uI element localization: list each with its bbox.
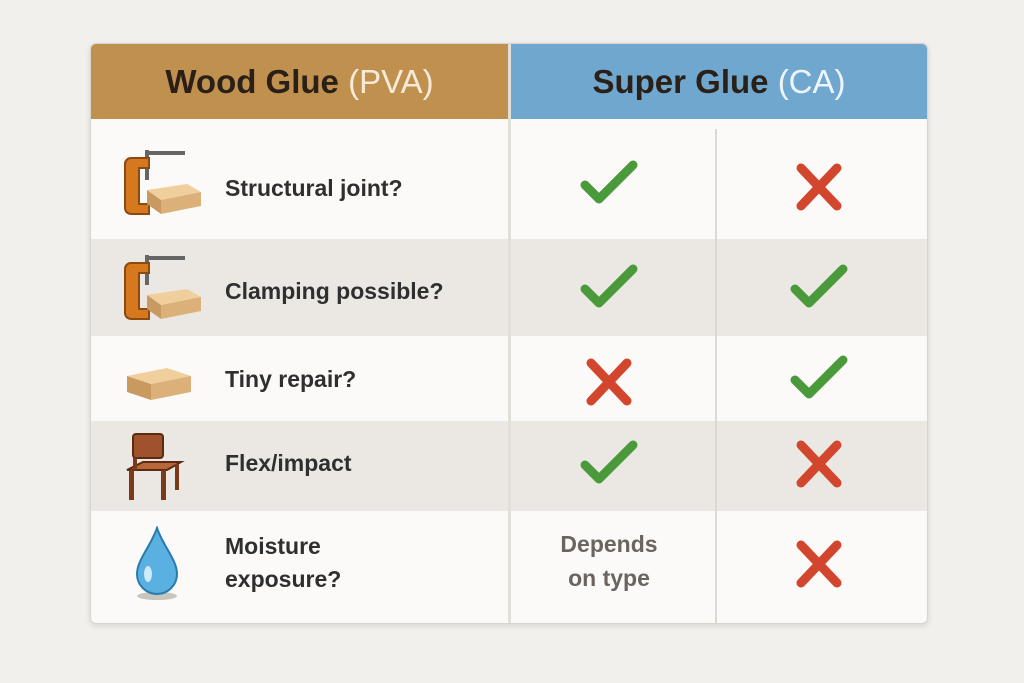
text: moisture exposure: exposure?	[225, 566, 341, 592]
row backgrounds	[91, 239, 927, 336]
text: depends on type	[560, 531, 658, 591]
text: structural joint: Structural joint?	[225, 175, 403, 201]
check r1	[580, 160, 638, 204]
check r4	[580, 440, 638, 484]
row 2 label	[124, 255, 444, 320]
header: super glue: Super Glue	[592, 62, 769, 100]
icon: clamp	[124, 150, 201, 215]
check r2	[580, 264, 638, 308]
header: wood glue: (PVA)	[348, 62, 434, 100]
header: super glue	[511, 44, 927, 119]
text: moisture exposure: Moisture	[225, 533, 321, 559]
icon: wood block	[127, 368, 191, 400]
table	[90, 43, 928, 624]
text: tiny repair: Tiny repair?	[225, 366, 356, 392]
row 1 label	[124, 150, 403, 215]
cross r4	[796, 440, 842, 488]
row 3 label	[127, 366, 356, 400]
text: depends on type: Depends	[560, 531, 658, 557]
header: wood glue	[91, 44, 508, 119]
row 5 label	[136, 526, 341, 600]
header: wood glue: Wood Glue	[165, 62, 339, 100]
text: clamping possible: Clamping possible?	[225, 278, 444, 304]
icon: water drop	[136, 526, 178, 600]
cross r1	[796, 164, 842, 210]
row 4 label	[126, 433, 352, 500]
check r3	[790, 356, 848, 398]
check r2	[790, 264, 848, 308]
cross r3	[586, 358, 632, 406]
marks column PVA	[560, 160, 658, 591]
cross r5	[796, 540, 842, 588]
icon: clamp	[124, 255, 201, 320]
header: super glue: (CA)	[778, 62, 846, 100]
text: moisture exposure	[225, 533, 341, 592]
text: flex/impact: Flex/impact	[225, 450, 352, 476]
icon: chair	[126, 433, 185, 500]
text: depends on type: on type	[568, 565, 650, 591]
marks column CA	[790, 164, 848, 588]
